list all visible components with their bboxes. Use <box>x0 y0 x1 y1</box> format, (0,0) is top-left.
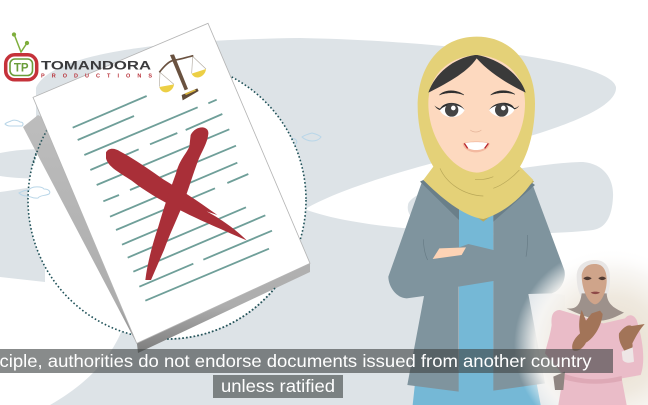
nose <box>470 130 481 132</box>
video glow background <box>510 245 648 405</box>
face <box>428 55 525 173</box>
scale base <box>182 88 199 100</box>
scale pans <box>159 84 174 92</box>
jacket shadow <box>420 177 535 222</box>
logo tv letters <box>10 59 32 76</box>
logo subtitle: PRODUCTIONS <box>41 74 152 80</box>
presenter body <box>388 177 565 405</box>
eyebrows <box>439 91 515 95</box>
document <box>33 23 310 343</box>
clouds <box>5 120 321 145</box>
logo wordmark: TOMANDORA <box>41 58 151 72</box>
logo: Tomandora Productions <box>6 33 152 80</box>
logo tv frame <box>6 55 37 80</box>
belt <box>564 374 622 384</box>
scale post <box>170 54 188 90</box>
mouth <box>463 141 490 152</box>
blue dress <box>413 203 541 405</box>
hijab creases <box>440 168 519 196</box>
interpreter dress <box>545 310 643 405</box>
logo antenna <box>13 33 28 52</box>
hair <box>428 55 526 93</box>
subtitle line two: unless ratified <box>221 376 335 396</box>
scales of justice icon <box>159 54 206 100</box>
scale beam <box>159 56 193 72</box>
text lines <box>73 96 272 301</box>
presenter character <box>388 37 565 405</box>
document shadow <box>23 115 310 353</box>
left hand <box>619 324 645 352</box>
paper sheet <box>33 23 310 343</box>
eyes <box>434 103 519 117</box>
hand <box>433 247 466 259</box>
white headscarf <box>577 260 610 303</box>
cloud on circle edge <box>19 187 50 198</box>
scale strings <box>159 56 206 87</box>
right hand <box>572 310 603 351</box>
grey scarf <box>567 293 624 321</box>
sign language interpreter video <box>510 245 648 405</box>
red cross mark <box>106 127 247 280</box>
dotted circle over shadow <box>33 130 275 339</box>
scarf fold <box>423 177 534 222</box>
yellow hijab <box>418 37 535 219</box>
cuff <box>622 347 634 363</box>
grey jacket <box>388 183 565 392</box>
dotted circle <box>28 61 306 339</box>
presenter head <box>418 37 535 222</box>
face <box>582 264 607 304</box>
sleeve creases <box>423 235 527 260</box>
facial features <box>583 277 606 294</box>
subtitle line one: ciple, authorities do not endorse documents issued from another country <box>0 351 592 371</box>
logo tv letters: TP <box>14 62 29 74</box>
